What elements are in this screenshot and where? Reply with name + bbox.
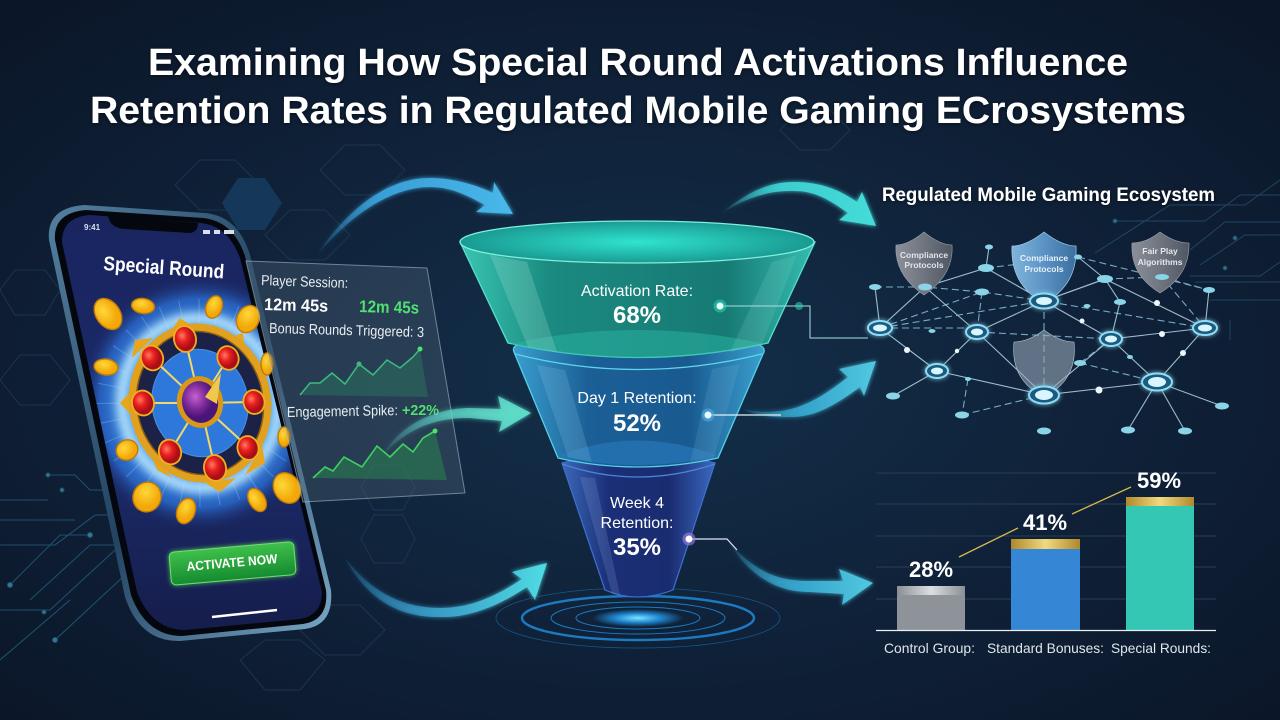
compliance shield center: Protocols (1024, 264, 1064, 274)
session stats text: Bonus Rounds Triggered: 3 (269, 321, 424, 341)
compliance shield left: Protocols (904, 260, 944, 270)
fair play shield right: Fair Play (1142, 246, 1178, 256)
wheel spikes (120, 318, 272, 492)
circuit traces left (0, 473, 135, 660)
wheel hub gem (178, 378, 222, 426)
bar: control group: 28% (909, 557, 953, 582)
chart labels: Special Rounds: (1111, 640, 1211, 656)
phone (49, 205, 331, 641)
chart labels (884, 640, 1211, 656)
activate button (169, 542, 296, 585)
fair play shield right (1132, 232, 1189, 293)
session stats text: 12m 45s (359, 297, 419, 318)
compliance shield center (1012, 232, 1076, 303)
fair play shield right: Algorithms (1138, 257, 1183, 267)
funnel tier: activation rate: Activation Rate: (581, 283, 693, 300)
wheel pointer (205, 373, 221, 404)
filled hexagon accent (222, 178, 282, 230)
arrow: panel to funnel (383, 396, 531, 455)
chart gridlines (876, 473, 1216, 599)
large network nodes (868, 294, 1217, 404)
bar: standard bonuses (1011, 510, 1080, 630)
session line chart (300, 346, 428, 397)
spin wheel (114, 310, 286, 496)
session stats text: 12m 45s (264, 295, 328, 316)
title (90, 42, 1186, 132)
bar: control group (897, 557, 965, 630)
circuit traces right (1095, 180, 1280, 340)
glass stats panel (246, 261, 465, 502)
funnel tier: activation rate (460, 221, 815, 358)
phone bezel (55, 210, 326, 636)
wheel spokes (143, 338, 253, 468)
session stats text: Player Session: (261, 273, 348, 292)
phone notch (108, 216, 198, 233)
chart baseline (876, 630, 1216, 632)
title: Examining How Special Round Activations Influence (148, 42, 1128, 84)
session stats text (261, 273, 439, 421)
dashed network links (875, 257, 1209, 415)
wheel burst glow (89, 276, 293, 525)
chart labels: Control Group: (884, 640, 975, 656)
lower shield (1014, 330, 1074, 397)
arrow: phone to funnel top (317, 178, 513, 255)
funnel tier: week 4 retention: Week 4 (610, 495, 664, 512)
funnel tier: week 4 retention: 35% (613, 534, 661, 561)
arrow: phone to funnel bottom (345, 558, 547, 617)
compliance shield center: Compliance (1020, 253, 1068, 263)
white network beads (904, 300, 1186, 394)
wheel gems (130, 324, 267, 483)
small network nodes (869, 244, 1229, 434)
status bar icons (203, 230, 234, 234)
session stats text: +22% (402, 403, 439, 419)
wheel rings (114, 310, 286, 496)
funnel tier: day 1 retention: 52% (613, 410, 661, 437)
funnel (460, 221, 815, 597)
panel glass (246, 261, 465, 502)
wheel hub (172, 372, 228, 432)
hexagon background pattern (0, 110, 850, 690)
trend lines (959, 487, 1131, 557)
bar: special rounds (1126, 468, 1194, 630)
arrow: day 1 to ecosystem (742, 361, 876, 417)
title: Retention Rates in Regulated Mobile Gaming ECrosystems (90, 90, 1186, 132)
phone frame (49, 205, 331, 641)
bar: standard bonuses: 41% (1023, 510, 1067, 535)
network heading: Regulated Mobile Gaming Ecosystem (882, 185, 1215, 206)
funnel tier: week 4 retention: Retention: (601, 515, 673, 532)
ecosystem network (868, 232, 1229, 434)
funnel callout lines and dots (682, 300, 868, 550)
large node centres (873, 297, 1212, 400)
funnel tier: day 1 retention: Day 1 Retention: (577, 390, 697, 407)
status bar time: 9:41 (84, 223, 101, 232)
gold coins (88, 293, 306, 526)
chart labels: Standard Bonuses: (987, 640, 1104, 656)
engagement line chart (313, 428, 447, 480)
session stats text: Engagement Spike: (287, 403, 398, 421)
network links (875, 247, 1222, 431)
phone screen (62, 215, 322, 630)
base rings under funnel (496, 588, 780, 648)
funnel tier: activation rate: 68% (613, 302, 661, 329)
retention bar chart (876, 468, 1216, 656)
bar: special rounds: 59% (1137, 468, 1181, 493)
arrow: week 4 to chart (730, 544, 873, 605)
screen title: Special Round (103, 253, 225, 283)
home indicator (212, 610, 277, 617)
arrow: funnel to ecosystem (722, 182, 876, 226)
activate button: ACTIVATE NOW (186, 551, 279, 574)
compliance shield left (896, 232, 952, 295)
funnel tier: week 4 retention (562, 454, 715, 597)
compliance shield left: Compliance (900, 250, 948, 260)
funnel tier: day 1 retention (513, 343, 764, 467)
